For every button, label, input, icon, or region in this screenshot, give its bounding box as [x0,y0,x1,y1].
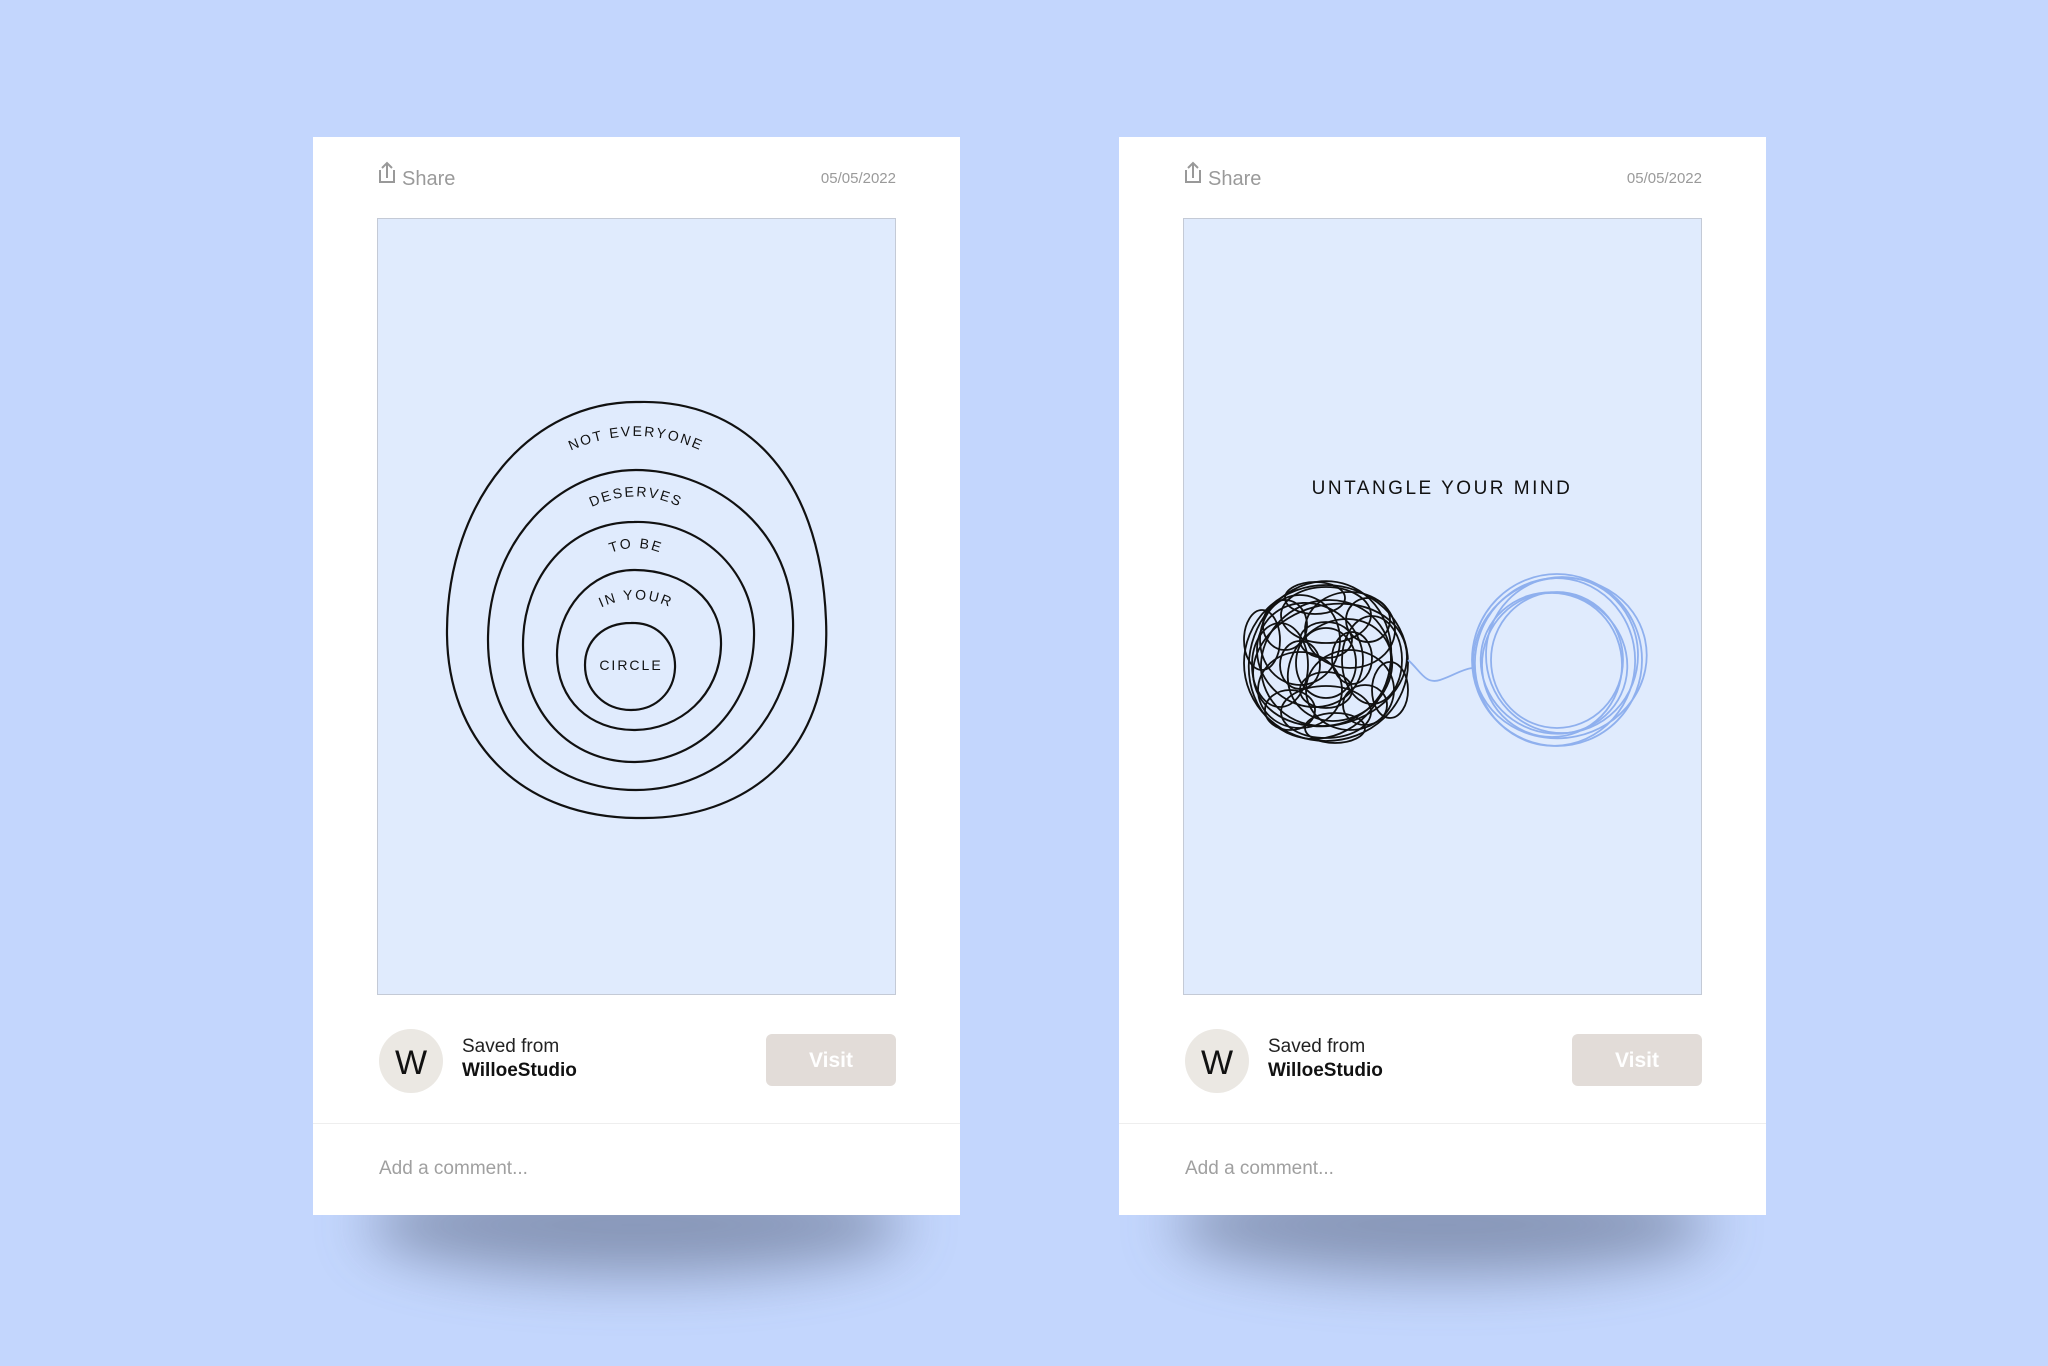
saved from text [462,1036,577,1081]
saved from text: Saved from [462,1036,559,1057]
saved from text: WilloeStudio [1268,1060,1383,1081]
visit button [766,1034,896,1086]
shadow: left card [366,1175,906,1275]
image: circle poster: DESERVES [589,486,681,506]
image: circle poster: TO BE [608,538,662,552]
avatar [379,1029,443,1093]
image: circle poster: CIRCLE [599,657,663,673]
saved from text: WilloeStudio [462,1060,577,1081]
date: 05/05/2022 [821,170,896,187]
icon: share [1186,163,1200,182]
scribble ball [1227,561,1421,759]
image: circle poster: IN YOUR [598,590,671,607]
panel: right card [1119,137,1766,1215]
icon: share [380,163,394,182]
visit button: Visit [809,1049,853,1072]
shadow: right card [1172,1175,1712,1275]
share label: Share [1208,168,1261,190]
image: untangle poster [1184,218,1702,994]
visit button: Visit [1615,1049,1659,1072]
avatar: W [395,1044,427,1082]
visit button [1572,1034,1702,1086]
image: circle poster [377,218,896,995]
comment input: Add a comment... [1185,1158,1334,1179]
blue loose circle [1457,562,1662,759]
image: circle poster: NOT EVERYONE [568,426,702,450]
date: 05/05/2022 [1627,170,1702,187]
avatar [1185,1029,1249,1093]
avatar: W [1201,1044,1233,1082]
panel: left card [313,137,960,1215]
poster title: UNTANGLE YOUR MIND [1312,478,1572,499]
saved from text [1268,1036,1383,1081]
connecting thread [1408,660,1472,681]
share label: Share [402,168,455,190]
comment input: Add a comment... [379,1158,528,1179]
saved from text: Saved from [1268,1036,1365,1057]
